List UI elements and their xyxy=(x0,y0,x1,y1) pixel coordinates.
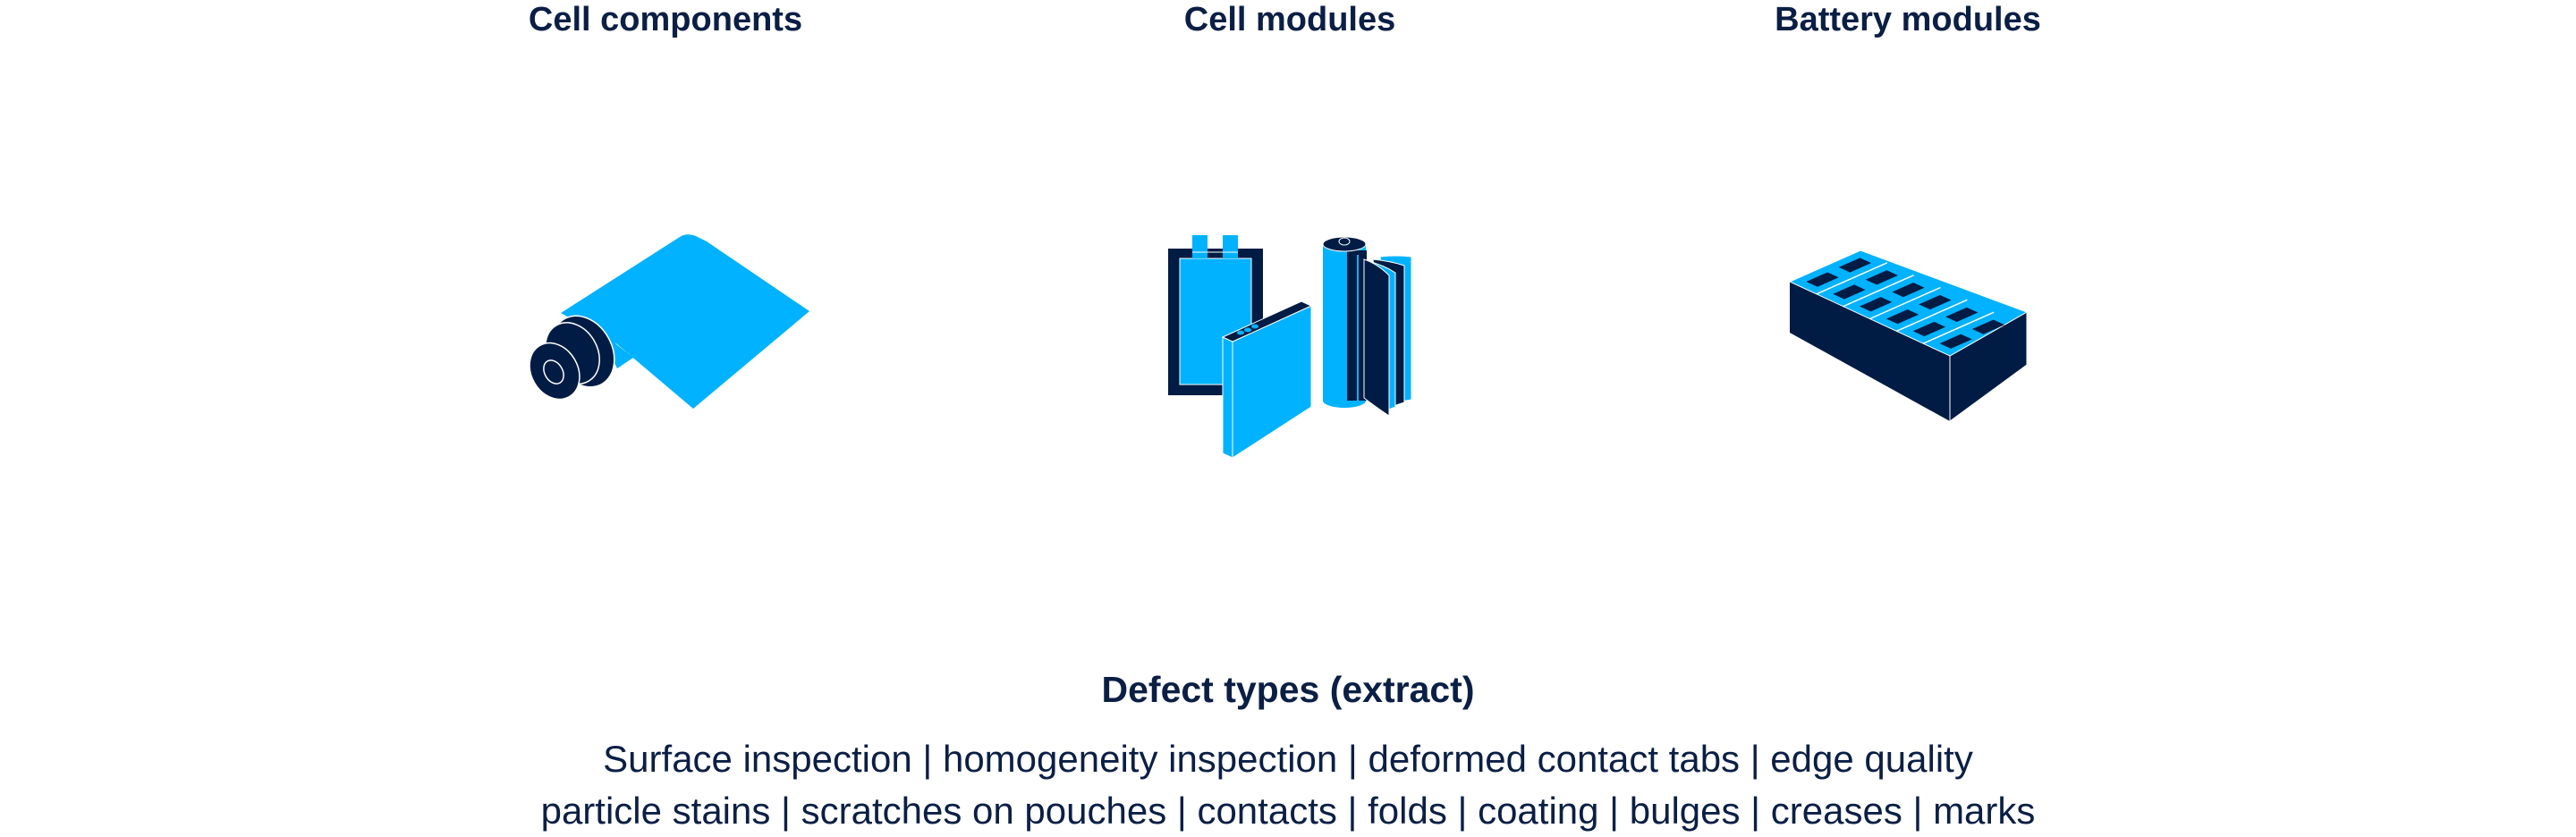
text: defect list xyxy=(541,738,2035,832)
icon: battery module xyxy=(1790,250,2027,421)
text: defect list: Surface inspection | homogeneity inspection | deformed contact tabs | edge quality xyxy=(603,738,1973,780)
heading: cell components: Cell components xyxy=(529,1,802,38)
icon: foil roll xyxy=(520,234,809,409)
text: defect list: particle stains | scratches on pouches | contacts | folds | coating | bulges | creases | marks xyxy=(541,790,2035,832)
pouch cell xyxy=(1168,249,1263,395)
heading: battery modules: Battery modules xyxy=(1775,1,2041,38)
cylindrical cell xyxy=(1380,256,1411,402)
heading: cell modules: Cell modules xyxy=(1184,1,1395,38)
icon: cells xyxy=(1168,235,1411,458)
prismatic cell xyxy=(1223,337,1233,458)
heading: defect types: Defect types (extract) xyxy=(1102,669,1474,710)
